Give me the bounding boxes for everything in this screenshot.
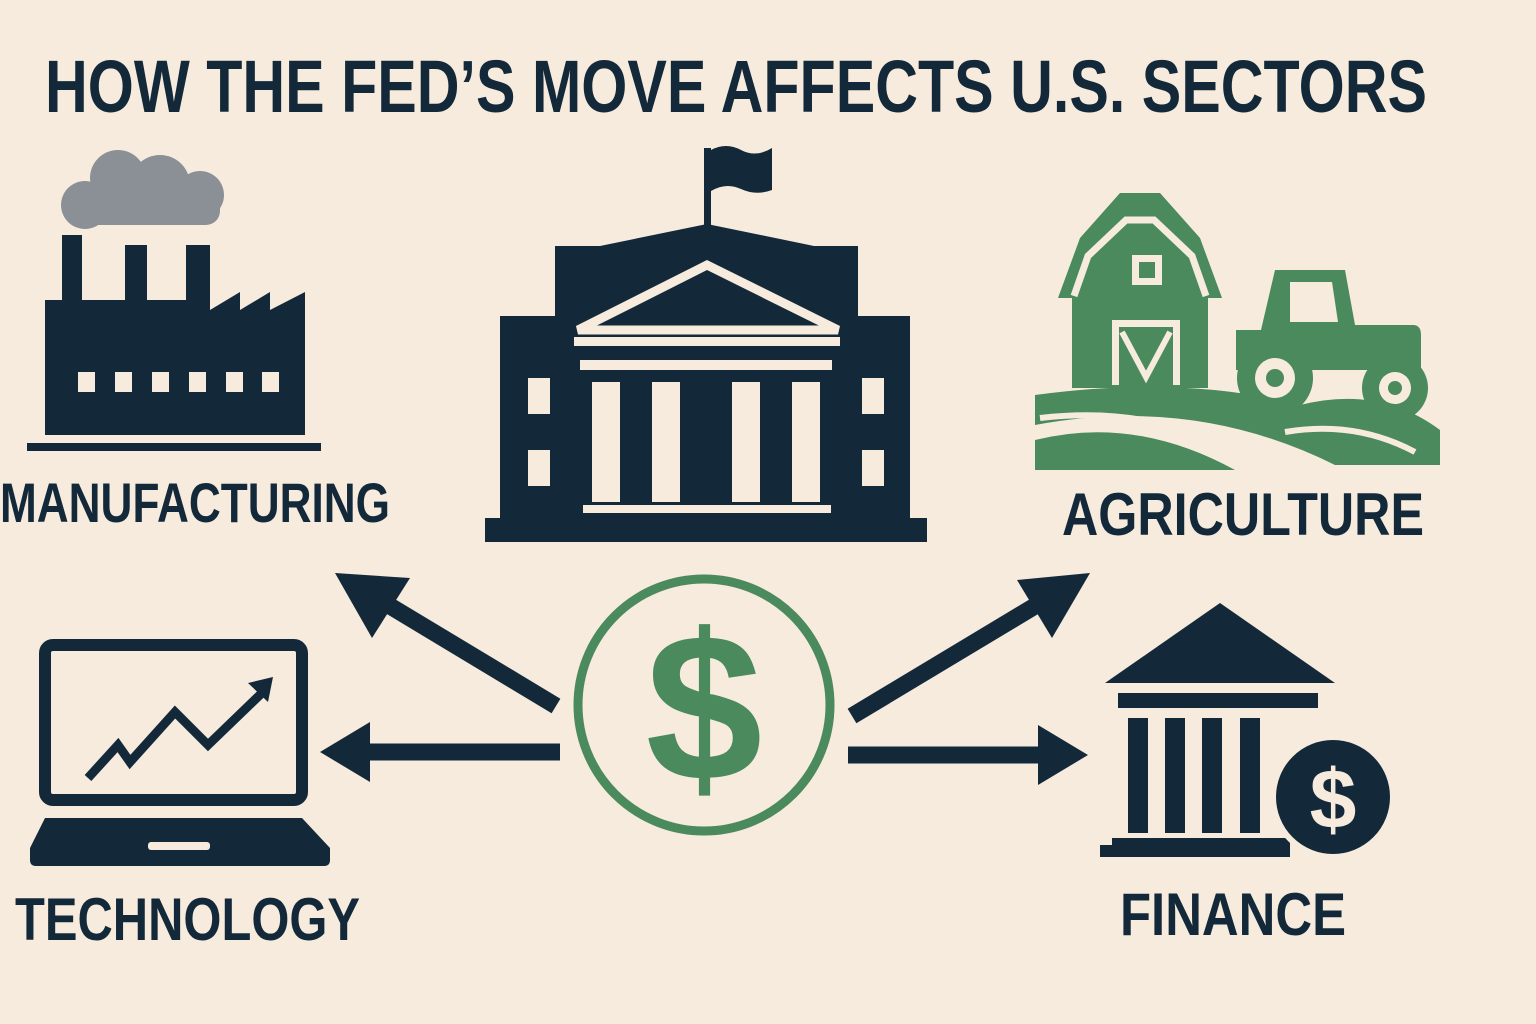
icon: bank with coin: $ (1310, 752, 1356, 846)
dollar circle (578, 579, 830, 831)
arrows (320, 573, 1090, 785)
icon: bank with coin (1100, 603, 1393, 857)
icon: smoke cloud (61, 150, 224, 229)
label: agriculture: AGRICULTURE (1062, 481, 1424, 548)
icon: barn and tractor (1035, 193, 1440, 470)
label: finance: FINANCE (1120, 881, 1346, 948)
arrow: to technology (320, 722, 560, 782)
label: technology: TECHNOLOGY (15, 886, 360, 953)
arrow: to agriculture (852, 573, 1090, 716)
icon: federal reserve building (485, 146, 927, 542)
icon: laptop (30, 645, 330, 866)
dollar circle: $ (646, 590, 762, 825)
arrow: to manufacturing (335, 573, 556, 706)
arrow: to finance (848, 725, 1088, 785)
icon: factory (27, 150, 321, 451)
label: manufacturing: MANUFACTURING (0, 471, 390, 534)
